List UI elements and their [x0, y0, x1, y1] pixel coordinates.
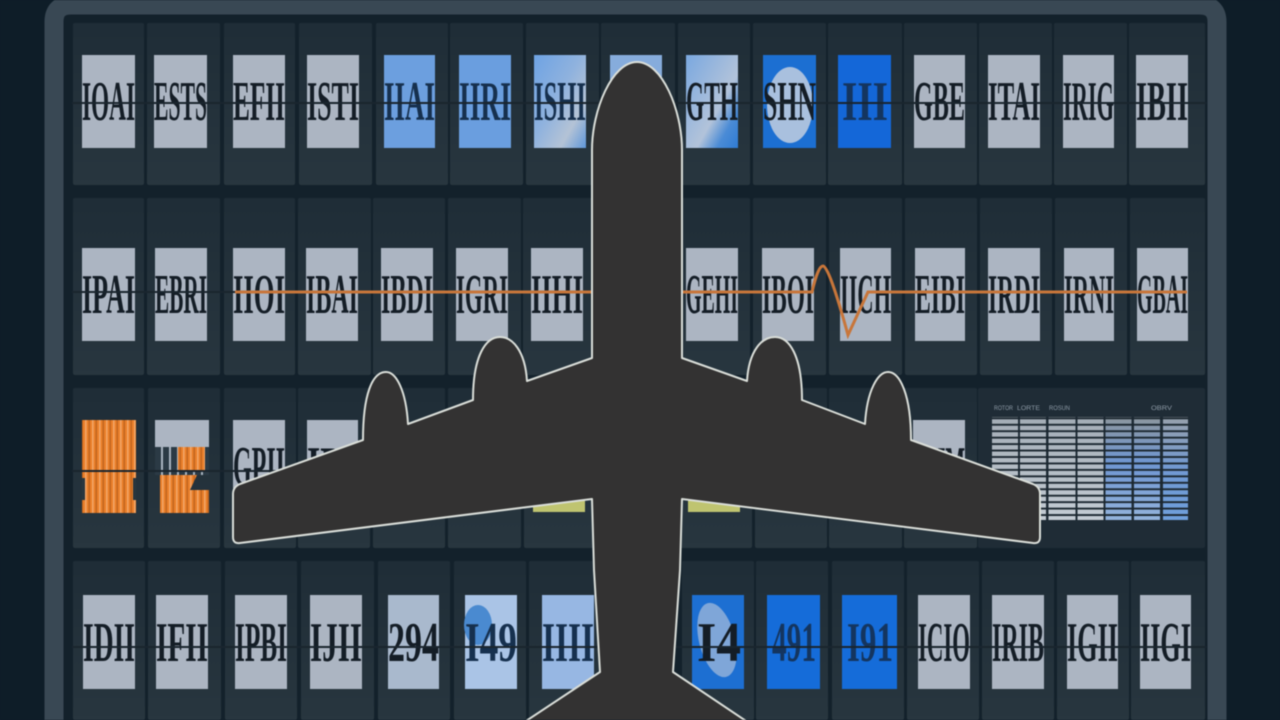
tile: row 1 column 10: [763, 55, 816, 148]
row 2: departure tiles: IBDI: [381, 264, 433, 326]
tile: row 2 column 15: [1137, 248, 1188, 341]
tile: row 1 column 3: [233, 55, 285, 148]
table headers: [994, 406, 1172, 412]
tile: row 1 column 2: [154, 55, 207, 148]
tile: row 2 column 1: [82, 248, 135, 341]
tile: row 1 column 11: [838, 55, 891, 148]
row 2: departure tiles: IRDI: [988, 264, 1040, 326]
tile: row 4 column 5: [388, 595, 439, 689]
row 4: departure tiles: [72, 561, 1206, 720]
row 1: departure tiles: IIRI: [459, 71, 511, 133]
row 1: departure tiles: IIAI: [384, 71, 435, 133]
tile: row 1 column 8: [610, 55, 662, 148]
tile: row 4 column 12: [842, 595, 897, 689]
tile: row 1 column 7: [534, 55, 586, 148]
tile: row 4 column 14: [992, 595, 1044, 689]
panel: flight data table: [978, 388, 1205, 548]
tile: row 3 column 3: [233, 420, 285, 498]
tile: row 4 column 16: [1140, 595, 1191, 689]
tile: row 2 column 12: [915, 248, 965, 341]
tile: row 3 hidden yellow marker left: [533, 495, 585, 512]
row 4: departure tiles: IGII: [1067, 612, 1118, 674]
tile: row 4 column 4: [310, 595, 362, 689]
tile: row 2 column 13: [988, 248, 1040, 341]
table columns: [992, 417, 1188, 520]
tile: row 1 column 15: [1136, 55, 1188, 148]
tile: row 3 column 12: [913, 420, 965, 498]
tile: row 4 column 12: I91: [847, 612, 893, 674]
tile: row 2 column 10: [762, 248, 814, 341]
tile: row 4 column 2: IFII: [156, 612, 208, 674]
row 1: departure tiles: ISTI: [307, 71, 359, 133]
row 1: departure tiles: ISHI: [534, 71, 586, 133]
tile: row 4 column 4: IJII: [310, 612, 362, 674]
tile: row 2 column 4: [306, 248, 358, 341]
row 2: departure tiles: IBOI: [762, 264, 814, 326]
tile: row 3 column 4: [307, 420, 358, 498]
tile: row 1 column 6: [459, 55, 511, 148]
row 1: departure tiles: IOAI: [82, 71, 135, 133]
table headers: ROSUN: [1049, 406, 1070, 412]
tile: row 1 column 4: [307, 55, 359, 148]
tile: row 4 column 10: I4: [697, 612, 741, 674]
row 2: departure tiles: IIHI: [531, 264, 583, 326]
row 4: departure tiles: IIGI: [1140, 612, 1191, 674]
tile: row 2 column 7: [531, 248, 583, 341]
row 2: departure tiles: IIOI: [233, 264, 285, 326]
row 4: departure tiles: IDII: [83, 612, 135, 674]
tile: row 4 column 11: 491: [772, 612, 816, 674]
row 2: departure tiles: IGRI: [456, 264, 508, 326]
tile: row 1 column 11: III: [842, 71, 888, 133]
airplane silhouette: [233, 62, 1040, 720]
row 3: departure tiles: GPII: [233, 436, 285, 498]
row 4: departure tiles: IRIB: [992, 612, 1044, 674]
tile: row 4 column 1: [83, 595, 135, 689]
row 1: departure tiles: GBE: [914, 71, 965, 133]
text: IHIM: [913, 436, 965, 498]
tile: row 4 column 11: [767, 595, 820, 689]
table headers: OBRV: [1151, 406, 1172, 412]
tile: row 3 hidden yellow marker right: [688, 495, 740, 512]
row 2: departure tiles: IBAI: [306, 264, 358, 326]
text: GBAI: [1137, 264, 1188, 326]
tile: row 1 column 12: [914, 55, 965, 148]
tile: row 4 column 6: [464, 595, 517, 689]
tile: row 4 column 7: [542, 595, 594, 689]
tile: row 3 partial orange: [155, 420, 209, 513]
row 1: departure tiles: ESTS: [154, 71, 207, 133]
tile: row 4 column 5: 294: [388, 612, 439, 674]
tile: row 1 column 1: [82, 55, 135, 148]
tile: row 1 column 14: [1063, 55, 1114, 148]
table headers: LORTE: [1017, 406, 1040, 412]
row 1: departure tiles: GTH: [686, 71, 738, 133]
row 2: departure tiles: IICH: [840, 264, 891, 326]
table headers: ROTOR: [994, 406, 1014, 412]
row 3: departure tiles: [72, 388, 977, 548]
tile: row 4 column 13: [918, 595, 970, 689]
tile: row 1 column 9: [686, 55, 738, 148]
row 2: departure tiles: IRNI: [1064, 264, 1114, 326]
row 2: departure tiles: IPAI: [82, 264, 135, 326]
row 2: departure tiles: [72, 198, 1205, 375]
tile: row 2 column 2: [155, 248, 207, 341]
orange trend line: [235, 266, 1187, 335]
tile: row 4 column 10: [690, 595, 744, 689]
tile: row 1 column 5: [384, 55, 435, 148]
tile: row 2 column 5: [381, 248, 433, 341]
tile: row 1 column 13: [988, 55, 1040, 148]
row 2: departure tiles: EIBI: [915, 264, 965, 326]
tile: row 4 column 7: IIII: [542, 612, 594, 674]
tile: row 2 column 3: [233, 248, 285, 341]
tile: row 4 column 3: [235, 595, 287, 689]
tile: row 4 column 2: [156, 595, 208, 689]
tile: row 2 column 11: [840, 248, 891, 341]
tile: row 1 column 15: IBII: [1136, 71, 1188, 133]
tile: row 2 column 14: [1064, 248, 1114, 341]
tile: row 3 column 4: IRI: [307, 436, 358, 498]
row 1: departure tiles: ITAI: [988, 71, 1040, 133]
row 2: departure tiles: GEHI: [686, 264, 738, 326]
tile: row 2 column 6: [456, 248, 508, 341]
row 1: departure tiles: IRIG: [1063, 71, 1114, 133]
row 1: departure tiles: EFII: [233, 71, 285, 133]
tile: row 4 column 6: I49: [465, 612, 517, 674]
row 2: departure tiles: EBRI: [155, 264, 207, 326]
tile: row 3 orange alert: [82, 420, 136, 513]
tile: row 2 column 9: [686, 248, 738, 341]
row 4: departure tiles: ICIO: [918, 612, 970, 674]
row 1: departure tiles: SHN: [763, 71, 816, 133]
row 1: departure tiles: [72, 23, 1206, 185]
tile: row 4 column 15: [1067, 595, 1118, 689]
row 4: departure tiles: IPBI: [235, 612, 287, 674]
